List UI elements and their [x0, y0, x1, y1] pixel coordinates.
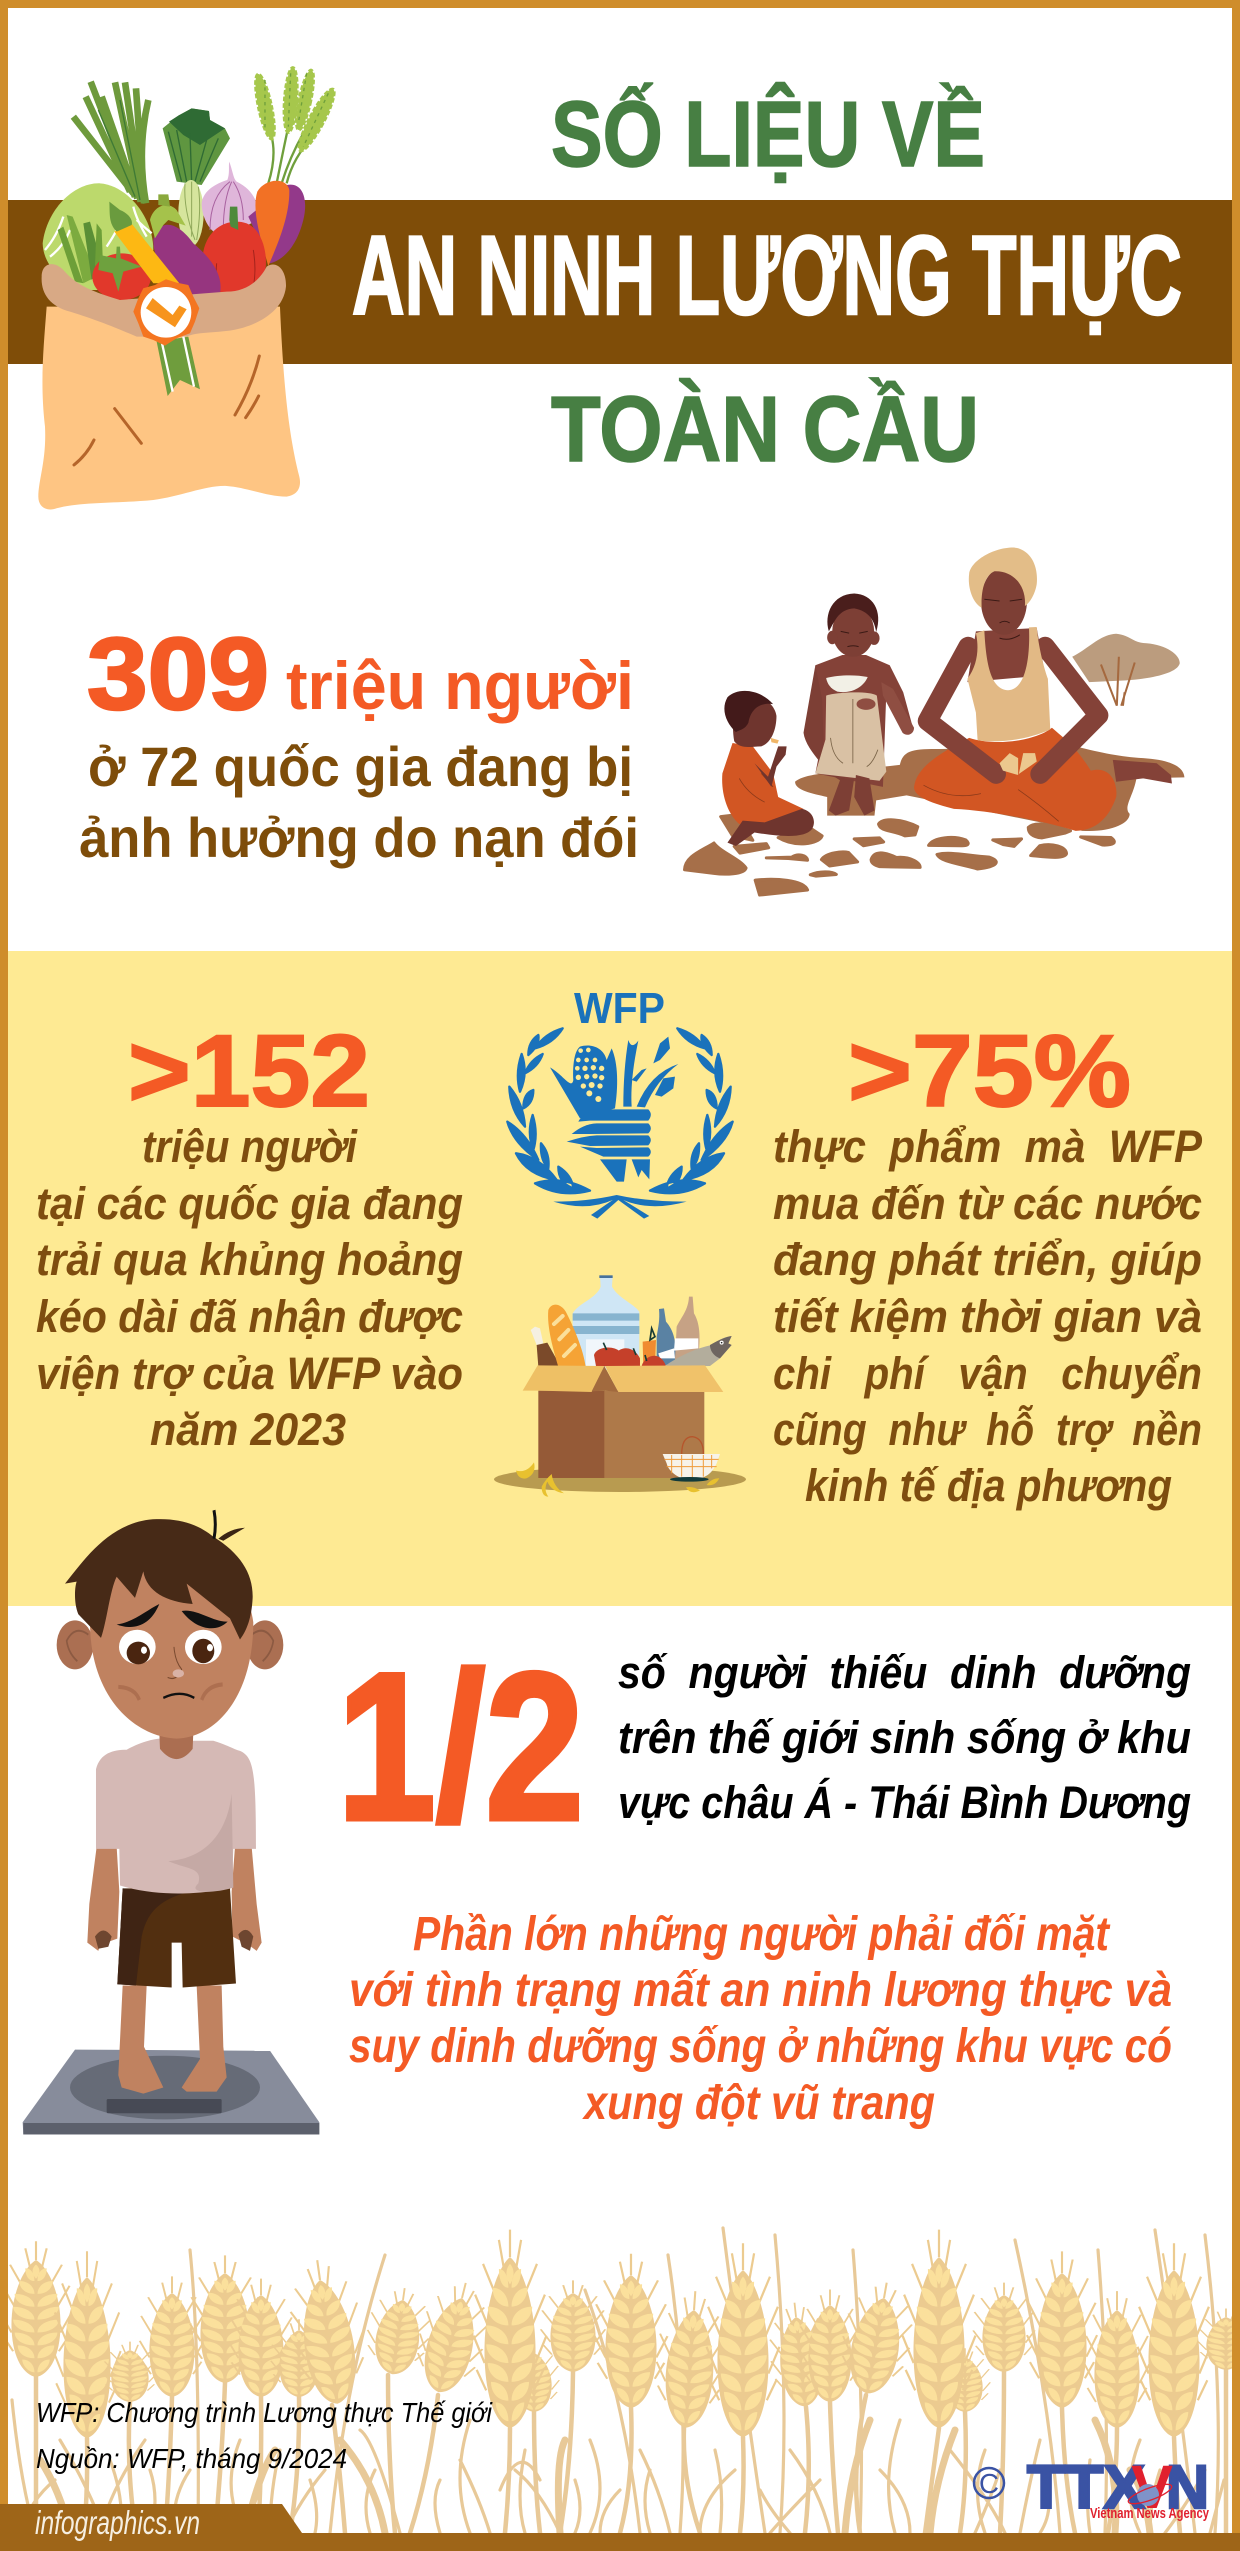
copyright mark: [974, 2468, 1004, 2499]
mother arms: [928, 647, 996, 774]
mother head: [981, 567, 1027, 635]
logo: TTXVN: [974, 2453, 1209, 2522]
ground shadow: [494, 1467, 746, 1492]
teenager: [804, 594, 914, 816]
toddler head: [733, 695, 776, 747]
box body: [538, 1391, 605, 1478]
check mark: [146, 298, 187, 327]
teenager legs: [829, 775, 874, 816]
leek: [163, 108, 230, 185]
number >75%: >75%: [848, 1014, 1131, 1128]
shorts: [117, 1888, 236, 1988]
title: Số liệu về: SỐ LIỆU VỀ: [551, 82, 985, 186]
carrot: [255, 181, 289, 266]
callout: conflict zones: [349, 1908, 1172, 2130]
hair: [827, 594, 878, 632]
icon: hungry family: [685, 548, 1184, 895]
header band: [8, 200, 1232, 364]
mother face lines: [984, 599, 1022, 639]
hair: [65, 1519, 253, 1640]
carrot and tomatoes: [643, 1340, 656, 1367]
right stat body text: kinh tế địa phương: [805, 1460, 1172, 1511]
right stat body text: mua đến từ các nước: [773, 1178, 1202, 1229]
ribbon: [157, 337, 200, 396]
footer site name: infographics.vn: [35, 2504, 200, 2541]
number 1/2: 1/2: [337, 1629, 584, 1864]
bottles: [657, 1308, 676, 1367]
neck: [159, 1733, 193, 1759]
hair tuft: [214, 1510, 215, 1539]
callout: conflict zones: Phần lớn những người phải đối mặt: [413, 1908, 1111, 1961]
nose and mouth: [168, 1647, 182, 1678]
mother tank top: [967, 627, 1050, 741]
title: Toàn cầu: TOÀN CẦU: [551, 377, 979, 481]
left stat body text: viện trợ của WFP vào: [36, 1348, 463, 1399]
text: 309 triệu người: [87, 617, 634, 731]
cabbage: [43, 183, 153, 290]
WFP wordmark: WFP: [574, 984, 665, 1033]
toddler: [722, 691, 814, 846]
panel: yellow WFP section background: [8, 951, 1232, 1606]
mother foot: [1113, 760, 1172, 784]
toddler leg: [727, 809, 814, 846]
bananas: [516, 1462, 564, 1497]
wordmark TTXVN: N: [1166, 2453, 1209, 2521]
left stat body text: kéo dài đã nhận được: [36, 1291, 463, 1342]
icon: vegetable bag: [38, 67, 340, 510]
panel: right stat: [773, 1014, 1203, 1511]
t-shirt: [96, 1739, 256, 1893]
chicken leg: [531, 1327, 543, 1345]
face: [90, 1553, 253, 1739]
bag body: [38, 307, 300, 510]
toddler dress: [722, 743, 804, 824]
left stat body text: năm 2023: [150, 1404, 346, 1455]
bag rim: [42, 264, 286, 337]
text: ở 72 quốc gia: ở 72 quốc gia đang bị: [88, 735, 633, 798]
panel: left stat: [36, 1014, 463, 1455]
icon: wheat field: [1, 2228, 1240, 2533]
footnote: source: Nguồn: WFP, tháng 9/2024: [36, 2443, 347, 2474]
basket: [682, 1437, 703, 1455]
bell pepper: [202, 222, 266, 293]
box flaps: [523, 1365, 604, 1392]
purple leaf: [248, 185, 305, 263]
teenager head: [832, 606, 874, 657]
footnote: source: WFP: Chương trình Lương thực Thế giới: [36, 2397, 493, 2428]
tree: [1072, 634, 1180, 682]
footnote: source: [36, 2397, 493, 2474]
right stat body text: thực phẩm mà WFP: [773, 1121, 1203, 1172]
legs: [118, 1986, 163, 2094]
ground: [795, 746, 1184, 831]
wordmark TTXVN: TTX: [1027, 2453, 1145, 2521]
copyright mark: C: [979, 2468, 999, 2499]
bag creases: [74, 356, 259, 465]
left stat body text: triệu người: [142, 1121, 358, 1172]
leek bulb: [178, 180, 204, 247]
right stat body text: tiết kiệm thời gian và: [773, 1291, 1202, 1342]
right stat body text: [773, 1121, 1203, 1511]
right stat body text: chi phí vận chuyển: [773, 1348, 1202, 1399]
right stat body text: đang phát triển, giúp: [773, 1234, 1202, 1285]
green onions: [73, 82, 148, 203]
text: half of undernourished people: số người thiếu dinh dưỡng: [618, 1647, 1191, 1698]
turban: [969, 548, 1037, 608]
fish: [664, 1336, 732, 1367]
mother: [914, 548, 1172, 831]
arms: [87, 1847, 119, 1951]
eyes: [119, 1630, 156, 1664]
text: ảnh hưởng do nạn đói: ảnh hưởng do nạn đói: [79, 806, 639, 869]
mother torso: [967, 628, 1045, 682]
asparagus: [58, 215, 103, 283]
icon: WFP logo: [507, 984, 733, 1219]
badge: [133, 279, 199, 346]
number >152: >152: [128, 1014, 370, 1128]
ears: [57, 1620, 93, 1669]
stones: [685, 815, 1114, 895]
laurel and hand: [507, 1028, 733, 1219]
mother skirt: [914, 728, 1116, 831]
text: half of undernourished people: trên thế giới sinh sống ở khu: [618, 1712, 1191, 1763]
footer bar: [0, 2504, 1240, 2551]
bowl: [826, 675, 868, 692]
eggplant: [153, 225, 221, 298]
baguette: [548, 1305, 586, 1367]
icon: sad boy on scale: [23, 1510, 319, 2134]
green grain stalks: [252, 67, 340, 183]
left stat body text: trải qua khủng hoảng: [36, 1234, 463, 1285]
water jug: [573, 1276, 639, 1370]
teenager cloth: [815, 692, 886, 781]
toddler arm: [754, 746, 787, 787]
left stat body text: tại các quốc gia đang: [36, 1178, 463, 1229]
number 309: 309: [87, 617, 269, 731]
callout: conflict zones: xung đột vũ trang: [581, 2077, 935, 2130]
text: half of undernourished people: [618, 1647, 1191, 1828]
label triệu người: triệu người: [286, 648, 634, 724]
tomato: [92, 253, 151, 300]
wordmark TTXVN: V: [1131, 2453, 1173, 2521]
onion: [202, 162, 258, 237]
left stat body text: [36, 1121, 463, 1455]
yellow squash: [114, 222, 179, 283]
bread: [1000, 753, 1037, 775]
scale: [23, 2050, 319, 2134]
icon: food box: [494, 1275, 746, 1497]
eyebrows: [117, 1604, 228, 1628]
globe: [1137, 2484, 1159, 2506]
food: [771, 738, 779, 744]
wordmark TTXVN: [1027, 2453, 1209, 2521]
